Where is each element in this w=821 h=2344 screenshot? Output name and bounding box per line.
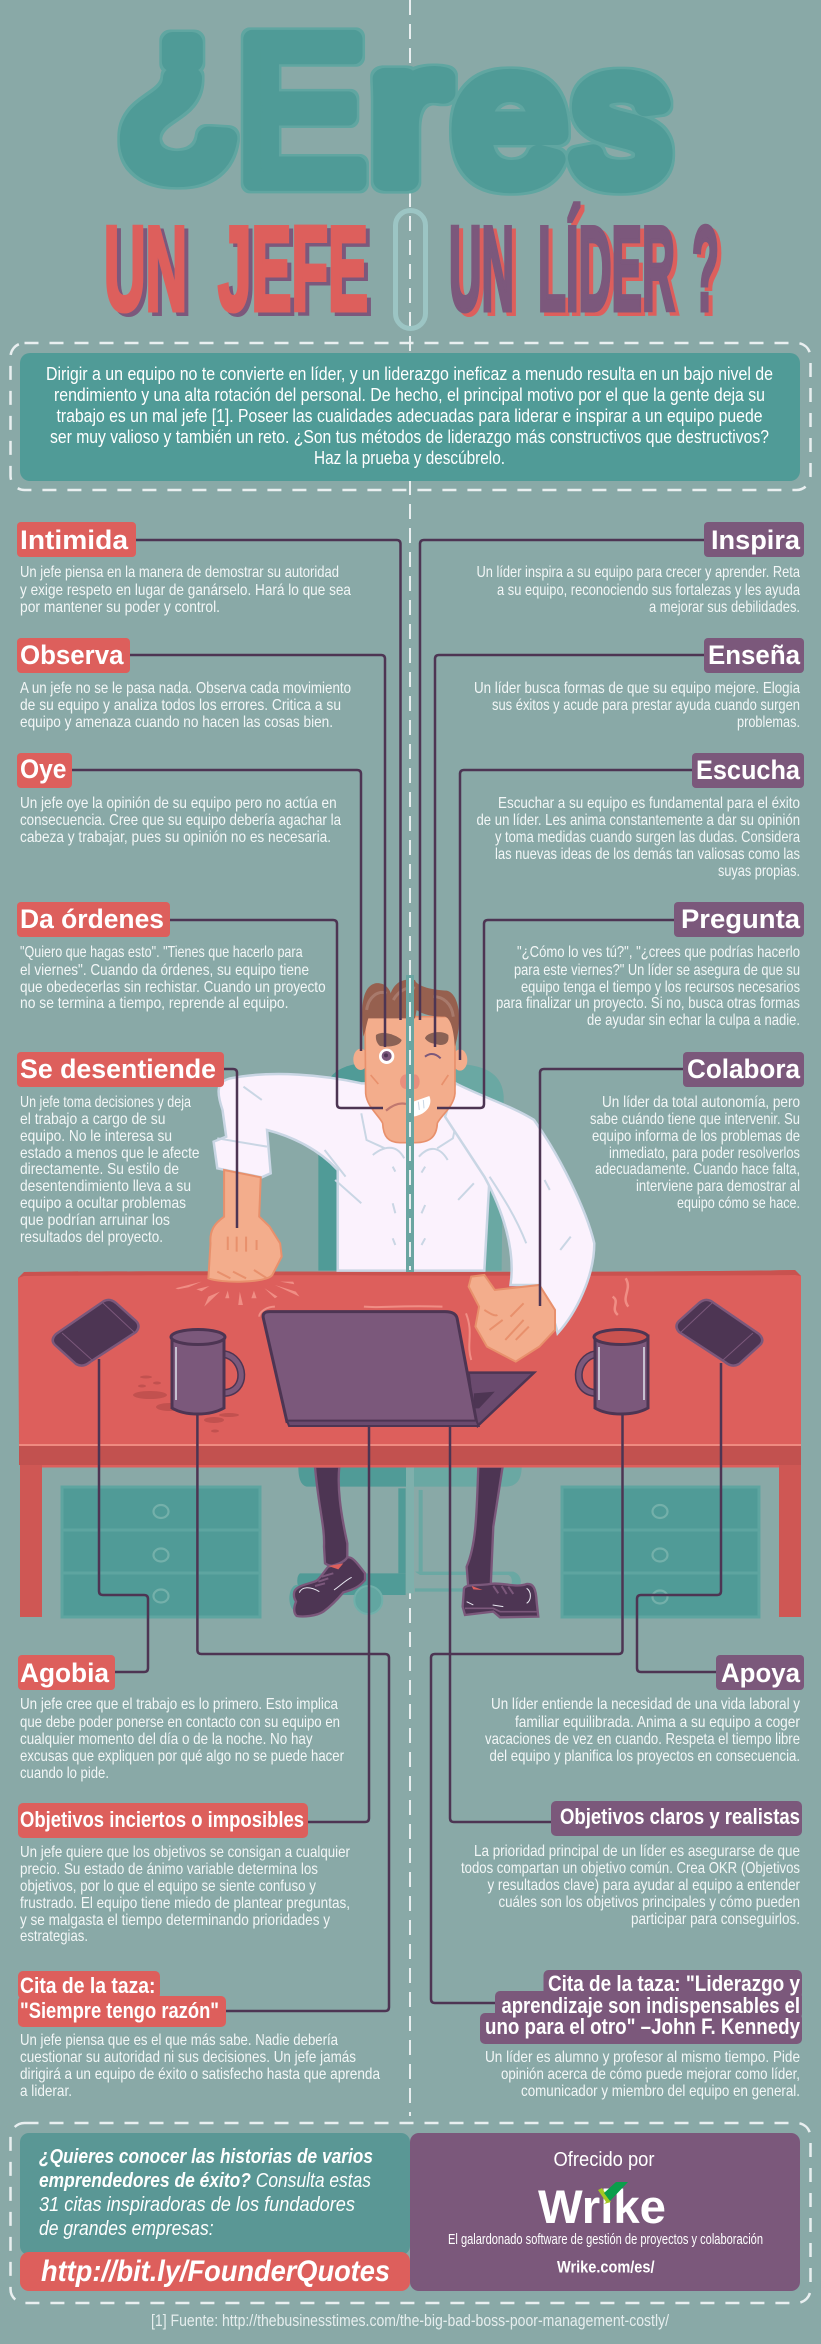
section: Observa: A un jefe no se le pasa nada. Observa cada movimiento (20, 680, 351, 697)
connector: Se desentiende (224, 1069, 237, 1228)
section: Se desentiende: desentendimiento lleva a su (20, 1178, 191, 1195)
center split strip (406, 975, 414, 1272)
section: Da órdenes: el viernes". Cuando da órdenes, su equipo tiene (20, 962, 309, 979)
section: Objetivos inciertos o imposibles: estrategias. (20, 1928, 88, 1945)
section: Cita de la taza jefe: a liderar. (20, 2083, 72, 2100)
connector: Escucha (460, 770, 692, 1060)
connector: Colabora (540, 1069, 683, 1306)
section: Cita de la taza líder (480, 1970, 802, 2100)
connector: Intimida (136, 540, 400, 1020)
section: Se desentiende (17, 1052, 224, 1246)
section: Objetivos inciertos o imposibles: objetivos, por lo que el equipo se siente confuso y (20, 1878, 316, 1895)
section: Enseña: problemas. (737, 714, 800, 731)
section: Pregunta: Pregunta (681, 904, 801, 934)
section: Da órdenes (17, 902, 326, 1012)
left forearm and fist (208, 1170, 282, 1282)
connector: Pregunta (437, 920, 674, 1108)
title: ¿Eres: s (573, 11, 669, 222)
connector: Cita izquierda (197, 1415, 389, 2011)
section: Cita de la taza jefe: Un jefe piensa que es el que más sabe. Nadie debería (20, 2032, 338, 2049)
section: Oye: Oye (20, 754, 66, 784)
section: Objetivos inciertos o imposibles (18, 1803, 351, 1945)
section: Oye (17, 753, 341, 846)
section: Se desentiende: equipo. No le interesa su (20, 1128, 172, 1145)
section: Se desentiende: Se desentiende (20, 1054, 216, 1084)
subtitle: un líder: UN (449, 202, 514, 336)
section: Objetivos claros y realistas (461, 1801, 802, 1928)
connector: Apoya (637, 1363, 721, 1672)
shirt and left arm (214, 1074, 490, 1271)
section: Intimida (17, 522, 351, 616)
section: Agobia: Un jefe cree que el trabajo es lo primero. Esto implica (20, 1696, 338, 1713)
section: Cita de la taza jefe: Cita de la taza: (20, 1973, 156, 1998)
section: Se desentiende: que podrían arruinar los (20, 1212, 170, 1229)
section: Observa: de su equipo y analiza todos los errores. Critica a su (20, 697, 341, 714)
title: ¿Eres (118, 0, 669, 226)
section: Observa (17, 638, 351, 731)
section: Enseña: Enseña (708, 640, 801, 670)
drawers (62, 1487, 759, 1617)
connector: Objetivos claros (450, 1427, 551, 1822)
subtitle: un jefe: UN (104, 202, 187, 336)
panel: founder quotes call to action (20, 2133, 410, 2291)
section: Se desentiende: equipo a ocultar problemas (20, 1195, 186, 1212)
section: Pregunta (496, 902, 804, 1029)
subtitle: un líder (449, 202, 719, 336)
laptop (259, 1306, 534, 1426)
section: Inspira (476, 522, 804, 616)
section: Agobia: cualquier momento del día o de la noche. No hay (20, 1731, 313, 1748)
section: Oye: consecuencia. Cree que su equipo debería agachar la (20, 812, 341, 829)
desk (20, 1446, 801, 1617)
section: Apoya: Apoya (721, 1658, 801, 1688)
panel: founder quotes call to action: emprendedores de éxito? Consulta estas (39, 2170, 371, 2192)
text: JEFE (218, 202, 368, 336)
title: ¿Eres: E (236, 0, 366, 226)
section: Oye: Un jefe oye la opinión de su equipo pero no actúa en (20, 795, 337, 812)
connector: Inspira (420, 540, 704, 1020)
section: Da órdenes: "Quiero que hagas esto". "Tienes que hacerlo para (20, 944, 303, 961)
section: Objetivos inciertos o imposibles: Un jefe quiere que los objetivos se consigan a cualquier (20, 1844, 351, 1861)
section: Objetivos inciertos o imposibles: y se malgasta el tiempo determinando prioridades y (20, 1912, 330, 1929)
section: Escucha: suyas propias. (718, 863, 800, 880)
phones (53, 1300, 762, 1366)
section: Se desentiende: el trabajo a cargo de su (20, 1111, 166, 1128)
section: Colabora: Colabora (687, 1054, 801, 1084)
connector: Observa (130, 655, 385, 1047)
impact marks (175, 1282, 299, 1307)
head (353, 980, 467, 1143)
section: Agobia: excusas que expliquen por qué algo no se puede hacer (20, 1748, 345, 1765)
chair back (175, 1064, 628, 1362)
footer panel: dashed frame (10, 2123, 810, 2303)
logo: Wrike: Wrike (538, 2180, 666, 2233)
connector: Oye (72, 770, 361, 1051)
title: ¿Eres: r (370, 6, 447, 221)
section: Agobia: que debe poder ponerse en contacto con su equipo en (20, 1714, 340, 1731)
panel: offered by Wrike: Ofrecido por (554, 2149, 655, 2171)
section: Agobia: Agobia (20, 1658, 110, 1688)
section: Inspira: Inspira (711, 525, 801, 555)
connector: Objetivos inciertos (308, 1427, 369, 1822)
connector: Enseña (435, 655, 704, 1047)
panel: founder quotes call to action: de grandes empresas: (39, 2218, 214, 2240)
right hand (469, 1275, 555, 1362)
connector: Agobia (99, 1359, 148, 1672)
title: ¿Eres: e (454, 11, 566, 222)
section: Cita de la taza jefe: dirigirá a un equipo de éxito o satisfecho hasta que aprenda (20, 2066, 380, 2083)
section: Objetivos inciertos o imposibles: Objetivos inciertos o imposibles (20, 1807, 304, 1832)
coffee spills (133, 1376, 239, 1432)
section: Se desentiende: resultados del proyecto. (20, 1229, 163, 1246)
panel: offered by Wrike: Wrike.com/es/ (557, 2258, 655, 2277)
panel: founder quotes call to action: http://bit.ly/FounderQuotes (41, 2255, 390, 2288)
text: ? (692, 202, 719, 336)
section: Oye: cabeza y trabajar, pues su opinión no es necesaria. (20, 829, 331, 846)
section: Intimida: y exige respeto en lugar de ganárselo. Hará lo que sea (20, 582, 351, 599)
right arm sleeve (445, 1083, 594, 1333)
section: Escucha: Escucha (696, 755, 801, 785)
section: Intimida: Intimida (20, 525, 129, 555)
section: Cita de la taza jefe: "Siempre tengo razón" (20, 1998, 219, 2023)
section: Apoya (485, 1655, 804, 1765)
illustration: desk and boss-leader figure (18, 975, 801, 1617)
mugs (171, 1330, 648, 1414)
section: Intimida: Un jefe piensa en la manera de demostrar su autoridad (20, 564, 339, 581)
subtitle: letter o pill (396, 210, 426, 328)
section: Agobia (18, 1655, 345, 1782)
section: Intimida: por mantener su poder y control. (20, 599, 220, 616)
section: Se desentiende: Un jefe toma decisiones y deja (20, 1094, 191, 1111)
section: Se desentiende: directamente. Su estilo de (20, 1161, 179, 1178)
section: Observa: Observa (20, 640, 124, 670)
panel: founder quotes call to action: 31 citas inspiradoras de los fundadores (39, 2194, 355, 2216)
section: Cita de la taza jefe (18, 1971, 380, 2100)
section: Objetivos inciertos o imposibles: precio. Su estado de ánimo variable determina los (20, 1861, 318, 1878)
section: Objetivos inciertos o imposibles: frustrado. El equipo tiene miedo de plantear preguntas, (20, 1895, 350, 1912)
section: Observa: equipo y amenaza cuando no hacen las cosas bien. (20, 714, 333, 731)
connector: Da órdenes (170, 920, 383, 1108)
section: Da órdenes: no se termina a tiempo, reprende al equipo. (20, 995, 288, 1012)
panel: introduction (10, 343, 810, 490)
panel: offered by Wrike (410, 2133, 800, 2291)
panel: introduction: Haz la prueba y descúbrelo. (314, 448, 505, 468)
section: Da órdenes: que obedecerlas sin rechistar. Cuando un proyecto (20, 979, 326, 996)
section: Da órdenes: Da órdenes (20, 904, 164, 934)
section: Colabora (590, 1052, 804, 1212)
section: Agobia: cuando lo pide. (20, 1765, 109, 1782)
section: Se desentiende: estado a menos que le afecte (20, 1145, 200, 1162)
connector: Cita derecha (431, 1415, 622, 2003)
footnote: source: [1] Fuente: http://thebusinesstimes.com/the-big-bad-boss-poor-management-costly/ (151, 2311, 669, 2330)
section: Cita de la taza jefe: cuestionar su autoridad ni sus decisiones. Un jefe jamás (20, 2049, 356, 2066)
section: Enseña (474, 638, 804, 731)
section: Escucha (476, 753, 804, 880)
chair base and legs under the desk (289, 1467, 538, 1617)
panel: founder quotes call to action: ¿Quieres conocer las historias de varios (39, 2146, 373, 2168)
subtitle: un jefe (104, 202, 368, 336)
